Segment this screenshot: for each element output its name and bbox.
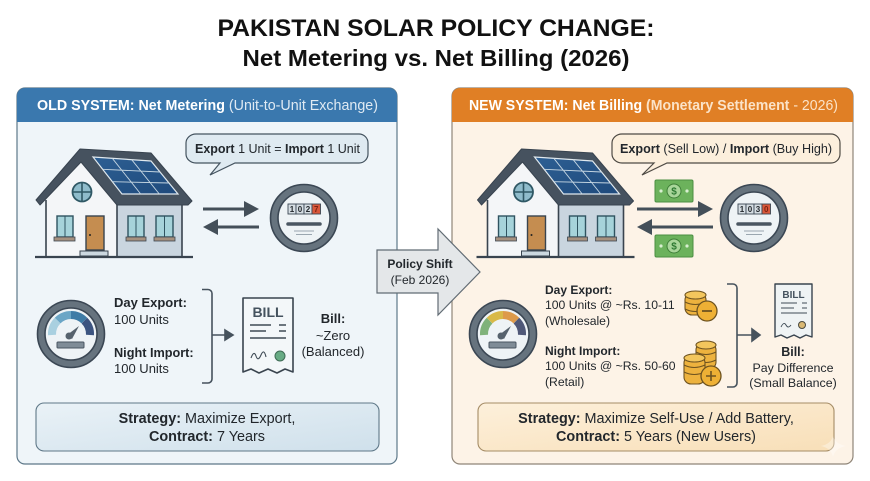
text: day export and night import rates: 100 Units @ ~Rs. 10-11 bbox=[545, 298, 675, 312]
strategy box: old system: Contract: 7 Years bbox=[149, 429, 265, 445]
text: day and night figures: Night Import: bbox=[114, 346, 194, 360]
text: bill result bbox=[302, 311, 364, 359]
icon: electricity meter bbox=[720, 184, 788, 252]
icon: cash imported: $ bbox=[671, 242, 677, 252]
panel: new system net billing bbox=[452, 88, 853, 464]
icon: electricity meter: 0 bbox=[298, 205, 303, 214]
arrow: policy shift bbox=[377, 229, 480, 315]
icon: gauge bbox=[470, 300, 536, 368]
icon: electricity meter: 0 bbox=[748, 205, 753, 214]
text: day export and night import rates: 100 Units @ ~Rs. 50-60 bbox=[545, 359, 676, 373]
arrow: policy shift: Policy Shift bbox=[387, 257, 453, 271]
icon: gauge bbox=[38, 300, 104, 368]
strategy box: old system: Strategy: Maximize Export, bbox=[119, 411, 295, 427]
icon: bill bbox=[243, 298, 293, 373]
icon: coins minus bbox=[685, 291, 717, 321]
callout: unit exchange: Export 1 Unit = Import 1 Unit bbox=[195, 142, 361, 156]
arrow: policy shift: (Feb 2026) bbox=[391, 273, 449, 287]
bracket and arrow to bill bbox=[727, 284, 760, 387]
text: bill result bbox=[749, 345, 837, 390]
text: day export and night import rates: Day Export: bbox=[545, 283, 612, 297]
text: day export and night import rates: (Retail) bbox=[545, 375, 584, 389]
icon: cash imported bbox=[655, 235, 693, 257]
text: bill result: Pay Difference bbox=[752, 361, 834, 375]
text: bill result: (Small Balance) bbox=[749, 376, 837, 390]
icon: cash exported bbox=[655, 180, 693, 202]
text: bill result: Bill: bbox=[321, 311, 345, 326]
text: bill result: ~Zero bbox=[316, 328, 350, 343]
text: day export and night import rates: (Wholesale) bbox=[545, 314, 610, 328]
arrows: export and import bbox=[203, 201, 259, 235]
arrows: export and import bbox=[637, 201, 713, 235]
title: Net Metering vs. Net Billing (2026) bbox=[242, 45, 630, 71]
icon: electricity meter: 0 bbox=[764, 205, 769, 214]
strategy box: new system bbox=[478, 403, 834, 451]
icon: coins plus bbox=[684, 341, 721, 386]
panel header: old system bbox=[17, 88, 397, 122]
callout: sell low buy high bbox=[612, 134, 840, 175]
panel header: new system: NEW SYSTEM: Net Billing (Monetary Settlement - 2026) bbox=[469, 98, 838, 114]
text: day and night figures: 100 Units bbox=[114, 361, 169, 376]
icon: house with solar panels bbox=[35, 149, 193, 257]
title bbox=[218, 15, 654, 71]
text: day and night figures: 100 Units bbox=[114, 312, 169, 327]
strategy box: new system: Contract: 5 Years (New Users) bbox=[556, 429, 756, 445]
panel header: old system: OLD SYSTEM: Net Metering (Unit-to-Unit Exchange) bbox=[37, 98, 378, 114]
watermark sparkle bbox=[821, 436, 846, 457]
icon: electricity meter: 2 bbox=[306, 205, 311, 214]
text: bill result: (Balanced) bbox=[302, 344, 364, 359]
icon: house with solar panels bbox=[476, 149, 634, 257]
icon: electricity meter: 1 bbox=[290, 205, 295, 214]
icon: electricity meter: 3 bbox=[756, 205, 761, 214]
text: bill result: Bill: bbox=[781, 345, 805, 359]
icon: bill: BILL bbox=[782, 290, 805, 301]
text: day export and night import rates bbox=[545, 283, 676, 389]
text: day export and night import rates: Night Import: bbox=[545, 344, 620, 358]
icon: bill: BILL bbox=[252, 304, 284, 320]
strategy box: old system bbox=[36, 403, 379, 451]
panel header: new system bbox=[452, 88, 853, 122]
icon: electricity meter: 7 bbox=[314, 205, 319, 214]
strategy box: new system: Strategy: Maximize Self-Use / Add Battery, bbox=[518, 411, 794, 427]
text: day and night figures: Day Export: bbox=[114, 295, 187, 310]
callout: sell low buy high: Export (Sell Low) / Import (Buy High) bbox=[620, 142, 832, 156]
icon: bill bbox=[775, 284, 812, 338]
title: PAKISTAN SOLAR POLICY CHANGE: bbox=[218, 15, 654, 42]
icon: electricity meter bbox=[270, 184, 338, 252]
icon: cash exported: $ bbox=[671, 186, 677, 198]
panel: old system net metering bbox=[17, 88, 397, 464]
bracket and arrow to bill bbox=[202, 290, 233, 383]
icon: electricity meter: 1 bbox=[740, 205, 745, 214]
callout: unit exchange bbox=[186, 134, 368, 175]
text: day and night figures bbox=[114, 295, 194, 376]
